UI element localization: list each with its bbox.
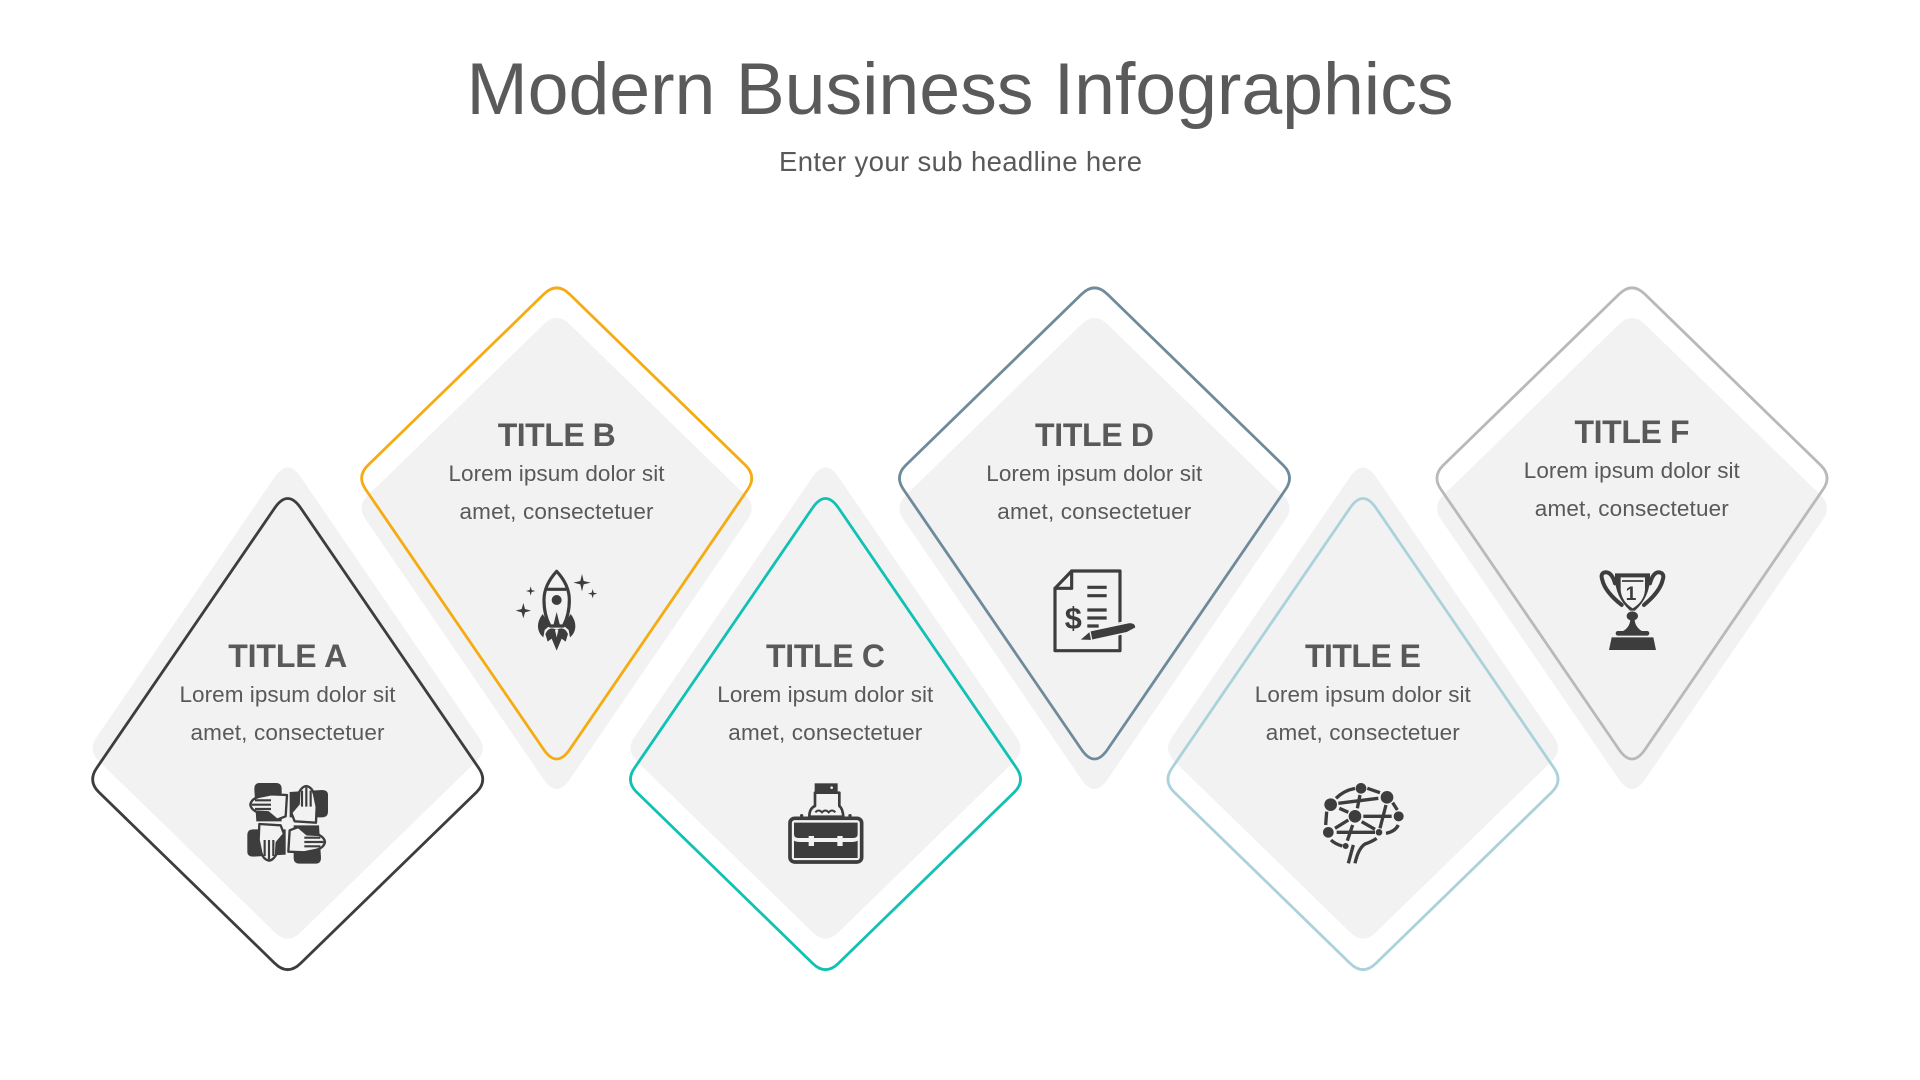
text B bbox=[448, 461, 665, 524]
text D: amet, consectetuer bbox=[997, 499, 1192, 524]
text B: amet, consectetuer bbox=[460, 499, 654, 524]
panel: Title F bbox=[1437, 288, 1827, 789]
heading B: TITLE B bbox=[498, 417, 616, 453]
panel: Title B bbox=[362, 288, 752, 789]
heading F: TITLE F bbox=[1574, 414, 1690, 450]
heading A: TITLE A bbox=[228, 638, 347, 674]
outline kite E bbox=[1168, 498, 1558, 970]
icon: trophy bbox=[1602, 572, 1663, 650]
panel: Title D bbox=[899, 288, 1290, 789]
icon: invoice and pen bbox=[1055, 571, 1136, 651]
panel: Title E bbox=[1168, 468, 1558, 970]
grey kite E bbox=[1168, 468, 1558, 939]
icon: invoice and pen: $ bbox=[1065, 602, 1082, 636]
outline kite A bbox=[93, 498, 483, 970]
text F: Lorem ipsum dolor sit bbox=[1524, 458, 1741, 483]
text D: Lorem ipsum dolor sit bbox=[986, 461, 1203, 486]
text E bbox=[1255, 682, 1472, 745]
text C: amet, consectetuer bbox=[728, 720, 923, 745]
icon: rocket bbox=[516, 571, 597, 651]
title: Modern Business Infographics bbox=[466, 47, 1454, 130]
text F bbox=[1524, 458, 1741, 521]
text B: Lorem ipsum dolor sit bbox=[448, 461, 665, 486]
panel: Title C bbox=[630, 468, 1021, 970]
panel: Title A bbox=[93, 468, 483, 970]
grey kite C bbox=[630, 468, 1021, 939]
icon: briefcase bbox=[790, 783, 862, 862]
grey kite D bbox=[899, 318, 1290, 789]
text E: Lorem ipsum dolor sit bbox=[1255, 682, 1472, 707]
text A: amet, consectetuer bbox=[190, 720, 385, 745]
outline kite D bbox=[899, 288, 1290, 759]
text C bbox=[717, 682, 934, 745]
text A bbox=[180, 682, 396, 745]
grey kite B bbox=[362, 318, 752, 789]
text C: Lorem ipsum dolor sit bbox=[717, 682, 934, 707]
icon: brain network bbox=[1323, 783, 1404, 863]
grey kite F bbox=[1437, 318, 1827, 789]
heading C: TITLE C bbox=[766, 638, 885, 674]
subtitle: Enter your sub headline here bbox=[779, 146, 1142, 177]
icon: trophy: 1 bbox=[1626, 584, 1637, 605]
heading E: TITLE E bbox=[1305, 638, 1421, 674]
text D bbox=[986, 461, 1203, 524]
outline kite F bbox=[1437, 288, 1827, 759]
text F: amet, consectetuer bbox=[1535, 496, 1729, 521]
outline kite C bbox=[630, 498, 1021, 970]
text E: amet, consectetuer bbox=[1266, 720, 1460, 745]
grey kite A bbox=[93, 468, 483, 939]
icon: four hands bbox=[247, 783, 328, 864]
text A: Lorem ipsum dolor sit bbox=[180, 682, 396, 707]
heading D: TITLE D bbox=[1035, 417, 1154, 453]
outline kite B bbox=[362, 288, 752, 759]
